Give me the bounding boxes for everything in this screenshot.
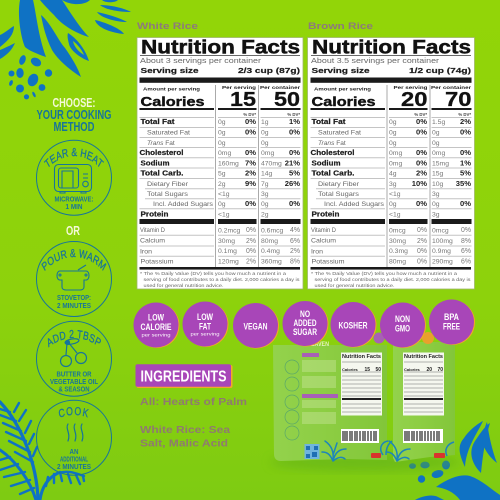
per container column: 0mg <box>432 150 445 157</box>
pouch mini nutrition label: 50 <box>375 367 381 373</box>
pouch mini nutrition label: 20 <box>426 367 432 373</box>
per serving column: 0% <box>416 117 427 126</box>
per container column: 5% <box>460 169 471 178</box>
badge: low fat: per serving <box>190 332 220 336</box>
pouch mini nutrition label: Calories <box>404 367 421 372</box>
per serving column <box>218 117 256 265</box>
per serving column: 30mg <box>218 238 235 245</box>
badge: non gmo <box>380 302 426 348</box>
per container column: 80mg <box>261 238 278 245</box>
row labels: Total Carb. <box>140 171 184 178</box>
per container column: 6% <box>461 258 471 265</box>
per serving column: 5g <box>218 171 226 178</box>
per serving column: 0% <box>245 148 256 157</box>
heading: white rice: White Rice <box>137 21 198 32</box>
per serving column: 0g <box>218 130 226 136</box>
per container column: 5% <box>289 169 300 178</box>
per serving column: 0% <box>246 248 256 255</box>
badge: low calorie: LOW <box>148 312 164 324</box>
per container column: 0% <box>289 128 300 136</box>
panel: brown rice nutrition facts: % DV* <box>458 112 471 117</box>
per serving column: 0mg <box>389 160 402 167</box>
per container column <box>261 117 300 265</box>
per serving column: 0mg <box>389 150 402 157</box>
panel: white rice nutrition facts: 15 <box>230 89 256 111</box>
panel: brown rice nutrition facts: Calories <box>312 94 376 109</box>
per container column: 2g <box>261 212 269 218</box>
step: tear and heat microwave: MICROWAVE: <box>54 196 94 204</box>
per container column: 15g <box>432 171 444 178</box>
panel: white rice nutrition facts <box>137 38 303 289</box>
panel: white rice nutrition facts: Amount per serving <box>143 86 200 92</box>
step: cook additional two minutes: COOK <box>58 407 89 418</box>
per serving column: 0mg <box>218 150 231 157</box>
per serving column: 0g <box>218 201 226 208</box>
step: add butter or oil <box>36 320 112 397</box>
ingredients heading: INGREDIENTS <box>140 368 227 386</box>
per serving column: 2% <box>245 169 256 178</box>
footnote: * The % Daily Value (DV) tells you how much a nutrient in a <box>140 271 287 276</box>
per container column: 26% <box>285 179 300 188</box>
per container column: 3g <box>432 191 440 198</box>
bottom-right leaf decoration <box>409 421 500 500</box>
step: add butter or oil: ADD 2 TBSP <box>48 330 101 348</box>
pouch barcode <box>403 429 443 443</box>
footnote: used for general nutrition advice. <box>314 283 394 288</box>
footnote <box>311 271 470 288</box>
pouch mini nutrition label: Nutrition Facts <box>342 354 381 360</box>
step: tear and heat microwave <box>36 140 112 216</box>
panel: brown rice nutrition facts: Amount per serving <box>314 86 371 92</box>
panel: brown rice nutrition facts: Per serving <box>394 85 428 90</box>
per serving column: 0% <box>417 248 427 255</box>
ingredients text: White Rice: Sea <box>140 424 230 436</box>
per serving column: 0g <box>218 119 226 126</box>
panel: brown rice nutrition facts: Serving size <box>312 66 370 75</box>
per container column: 0g <box>261 201 269 208</box>
pouch mini nutrition label: Calories <box>342 367 359 372</box>
badge: vegan <box>233 303 279 348</box>
heading: brown rice: Brown Rice <box>308 21 373 32</box>
per container column: 0% <box>289 148 300 157</box>
row labels: Total Fat <box>312 119 346 126</box>
badge: bpa free: BPA <box>444 312 459 323</box>
panel: brown rice nutrition facts: Per container <box>431 85 471 90</box>
per container column: 2% <box>460 117 471 126</box>
ingredients text: Salt, Malic Acid <box>140 438 228 450</box>
heading: choose your cooking method: CHOOSE: <box>52 96 96 110</box>
panel: white rice nutrition facts: Serving size <box>140 66 198 75</box>
row labels: Sodium <box>140 160 170 167</box>
per serving column: 0% <box>417 227 427 234</box>
pouch text blocks <box>302 353 338 424</box>
per serving column: 0g <box>389 119 397 126</box>
per serving column: 7% <box>245 158 256 167</box>
pouch round seals <box>374 332 434 344</box>
per container column: 3g <box>261 191 269 198</box>
per serving column: 0% <box>416 199 427 208</box>
per container column: 0.4mg <box>261 248 280 255</box>
row labels: Total Sugars <box>318 191 360 198</box>
per serving column: 0% <box>245 199 256 208</box>
row labels: Total Carb. <box>312 171 355 178</box>
per container column: 0% <box>460 199 471 208</box>
icon: steam <box>67 424 83 441</box>
per serving column: 160mg <box>218 160 239 167</box>
footnote: * The % Daily Value (DV) tells you how much a nutrient in a <box>311 271 458 276</box>
per serving column: 80mg <box>389 258 406 265</box>
pouch: white rice <box>273 342 387 461</box>
panel: white rice nutrition facts: About 3 servings per container <box>140 56 262 65</box>
row labels <box>140 119 214 265</box>
per serving column: 10% <box>412 179 427 188</box>
panel: white rice nutrition facts: % DV* <box>243 112 256 117</box>
per serving column: <1g <box>389 191 401 198</box>
row labels: Protein <box>140 212 168 218</box>
per serving column: 0.3mg <box>389 248 408 255</box>
per container column: 0g <box>261 130 269 136</box>
pouch qr code <box>304 444 320 459</box>
badge: low fat: LOW <box>197 312 213 323</box>
badge: no added sugar: SUGAR <box>293 327 317 338</box>
panel: white rice nutrition facts: Calories <box>140 94 204 109</box>
per container column: 0g <box>432 201 440 208</box>
row labels: Trans Fat <box>147 140 175 147</box>
badge: non gmo: GMO <box>395 324 410 334</box>
per serving column: 0.1mg <box>218 248 237 255</box>
per container column: 0% <box>460 148 471 157</box>
nutrition facts title: Nutrition Facts <box>141 38 300 58</box>
panel: brown rice nutrition facts: 70 <box>445 89 472 111</box>
row labels: Sodium <box>312 160 340 167</box>
per container column: 0.9mg <box>432 248 451 255</box>
per serving column: 0% <box>417 258 427 265</box>
panel: white rice nutrition facts: 50 <box>274 89 300 111</box>
row labels: Trans Fat <box>318 140 346 147</box>
pouch: brown rice <box>371 342 455 462</box>
row labels: Cholesterol <box>310 150 355 157</box>
per container column: 1.5g <box>432 119 445 126</box>
per container column: 14g <box>261 171 273 178</box>
pouch mini nutrition label <box>341 352 382 416</box>
per container column: 4% <box>290 227 300 234</box>
pouch mini nutrition label: 15 <box>364 367 370 373</box>
row labels: Iron <box>311 248 323 255</box>
pouch mini nutrition label <box>403 352 444 416</box>
row labels: Incl. Added Sugars <box>324 201 385 208</box>
badge: kosher <box>330 302 376 348</box>
per container column: 10g <box>432 181 444 188</box>
per container column: 0g <box>432 130 440 136</box>
badge: low calorie: per serving <box>142 332 171 338</box>
per serving column <box>389 117 427 265</box>
panel: brown rice nutrition facts: 20 <box>401 89 428 111</box>
per container column: 8% <box>461 238 471 245</box>
per container column: 0mg <box>261 150 274 157</box>
panel: white rice nutrition facts: 2/3 cup (87g) <box>238 66 301 75</box>
row labels: Saturated Fat <box>318 130 361 136</box>
badge: no added sugar: ADDED <box>294 318 317 329</box>
step: cook additional two minutes: ADDITIONAL <box>60 456 88 464</box>
step: pour and warm stovetop: POUR & WARM <box>41 249 106 271</box>
per serving column: <1g <box>389 212 401 218</box>
nutrition facts title: Nutrition Facts <box>312 38 471 58</box>
per container column: 2% <box>290 248 300 255</box>
or label: OR <box>66 224 80 238</box>
per container column: 0% <box>461 227 471 234</box>
step: add butter or oil: VEGETABLE OIL <box>50 379 99 386</box>
panel: brown rice nutrition facts: About 3.5 servings per container <box>311 56 440 65</box>
per serving column: 9% <box>245 179 256 188</box>
per serving column: 0.2mcg <box>218 228 241 234</box>
panel: brown rice nutrition facts: 1/2 cup (74g) <box>409 66 472 75</box>
panel: white rice nutrition facts: Per serving <box>222 85 256 90</box>
badge: low calorie <box>134 302 180 348</box>
panel: white rice nutrition facts: % DV* <box>287 112 300 117</box>
pouch palm and seal <box>371 441 454 461</box>
pouch barcode <box>341 429 379 443</box>
per container column: 8% <box>290 258 300 265</box>
ingredients heading <box>136 364 232 388</box>
per container column: 6% <box>461 248 471 255</box>
per container column: 0.6mcg <box>261 228 284 234</box>
per serving column: 4g <box>389 171 397 178</box>
row labels: Saturated Fat <box>147 130 190 136</box>
per serving column: 0% <box>416 158 427 167</box>
per container column: 21% <box>285 158 300 167</box>
per serving column: 0% <box>416 128 427 136</box>
icon: measuring spoons <box>60 338 86 366</box>
per container column <box>432 117 471 265</box>
per serving column: 0% <box>416 148 427 157</box>
per container column: 6% <box>290 238 300 245</box>
heading: choose your cooking method: YOUR COOKING <box>36 108 112 122</box>
panel: white rice nutrition facts: Per container <box>260 85 300 90</box>
row labels: Calcium <box>140 238 166 245</box>
per container column: 15mg <box>432 160 449 167</box>
per serving column: <1g <box>218 191 230 198</box>
badge: no added sugar: NO <box>300 309 310 320</box>
badge: bpa free: FREE <box>443 322 460 332</box>
per serving column: <1g <box>218 212 230 218</box>
ingredients text: All: Hearts of Palm <box>140 396 247 408</box>
row labels: Protein <box>312 212 340 218</box>
heading: choose your cooking method <box>36 96 112 134</box>
badge: low fat: FAT <box>199 322 211 332</box>
per serving column: 0% <box>245 117 256 126</box>
per serving column: 2% <box>246 238 256 245</box>
icon: pot <box>57 265 89 290</box>
per container column: 7g <box>261 181 269 188</box>
per serving column: 2% <box>416 169 427 178</box>
per serving column: 0g <box>389 130 397 136</box>
step: add butter or oil: BUTTER OR <box>56 372 92 378</box>
row labels: Calcium <box>311 238 337 245</box>
pouch cooking icons <box>285 360 299 440</box>
row labels: Total Sugars <box>147 191 189 198</box>
row labels: Dietary Fiber <box>147 181 189 188</box>
footnote <box>140 271 300 288</box>
per serving column: 2% <box>417 238 427 245</box>
row labels: Iron <box>140 248 152 255</box>
step: pour and warm stovetop <box>36 241 112 317</box>
pouch shadow <box>270 453 460 471</box>
per serving column: 30mg <box>389 238 406 245</box>
per serving column: 120mg <box>218 258 239 265</box>
step: cook additional two minutes: 2 MINUTES <box>57 464 91 471</box>
row labels: Total Fat <box>140 119 175 126</box>
per serving column: 0g <box>389 140 397 147</box>
per container column: 1% <box>289 117 300 126</box>
per container column: 0% <box>289 199 300 208</box>
step: cook additional two minutes <box>36 400 112 476</box>
per container column: 0g <box>261 140 269 147</box>
ingredients text <box>140 396 247 450</box>
badge: low calorie: CALORIE <box>140 322 172 333</box>
row labels: Vitamin D <box>140 227 165 234</box>
pouch brand mark: HEAVEN <box>307 342 329 348</box>
row labels: Incl. Added Sugars <box>153 201 214 208</box>
per container column: 1g <box>261 119 269 126</box>
panel: brown rice nutrition facts <box>308 38 474 289</box>
step: tear and heat microwave: TEAR & HEAT <box>44 148 104 167</box>
per container column: 470mg <box>261 160 282 167</box>
per container column: 0g <box>432 140 440 147</box>
footnote: serving of food contributes to a daily diet. 2,000 calories a day is <box>314 277 470 282</box>
row labels: Vitamin D <box>311 227 336 234</box>
row labels: Potassium <box>140 258 174 265</box>
pouch mini nutrition label: 70 <box>437 367 443 373</box>
badge: kosher: KOSHER <box>338 320 368 332</box>
top-left leaf decoration <box>0 0 131 99</box>
step: tear and heat microwave: 1 MIN <box>66 204 82 211</box>
row labels: Dietary Fiber <box>318 181 360 188</box>
badge: no added sugar <box>282 301 328 346</box>
step: pour and warm stovetop: STOVETOP: <box>57 295 91 302</box>
badge: bpa free <box>429 300 475 345</box>
per serving column: 0g <box>389 201 397 208</box>
row labels: Potassium <box>312 258 345 265</box>
product pouches <box>273 332 455 462</box>
per container column: 1% <box>460 158 471 167</box>
per serving column: 0% <box>246 227 256 234</box>
footnote: used for general nutrition advice. <box>144 283 224 288</box>
per container column: 360mg <box>261 258 282 265</box>
icon: microwave <box>54 164 92 193</box>
heading: choose your cooking method: METHOD <box>54 120 94 134</box>
step: pour and warm stovetop: 2 MINUTES <box>57 303 91 310</box>
badge: low fat <box>182 302 228 347</box>
per container column: 35% <box>456 179 471 188</box>
row labels: Cholesterol <box>140 150 184 157</box>
per container column: 0% <box>460 128 471 136</box>
per serving column: 0mcg <box>389 228 406 234</box>
pouch mini nutrition label: Nutrition Facts <box>404 354 443 360</box>
per serving column: 3g <box>389 181 397 188</box>
per container column: 3g <box>432 212 440 218</box>
bottom-left palm decoration <box>0 402 84 500</box>
per container column: 0mcg <box>432 228 449 234</box>
per serving column: 0% <box>245 128 256 136</box>
badge: non gmo: NON <box>395 314 410 325</box>
panel: brown rice nutrition facts: % DV* <box>414 112 427 117</box>
step: add butter or oil: & SEASON <box>58 386 90 394</box>
per serving column: 2g <box>218 181 226 188</box>
per container column: 290mg <box>432 258 453 265</box>
footnote: serving of food contributes to a daily diet. 2,000 calories a day is <box>144 277 300 282</box>
row labels <box>310 119 385 265</box>
pouch palm <box>322 441 346 461</box>
badge: vegan: VEGAN <box>244 322 268 332</box>
per container column: 100mg <box>432 238 453 245</box>
per serving column: 0g <box>218 140 226 147</box>
per serving column: 2% <box>246 258 256 265</box>
step: cook additional two minutes: AN <box>70 449 78 456</box>
